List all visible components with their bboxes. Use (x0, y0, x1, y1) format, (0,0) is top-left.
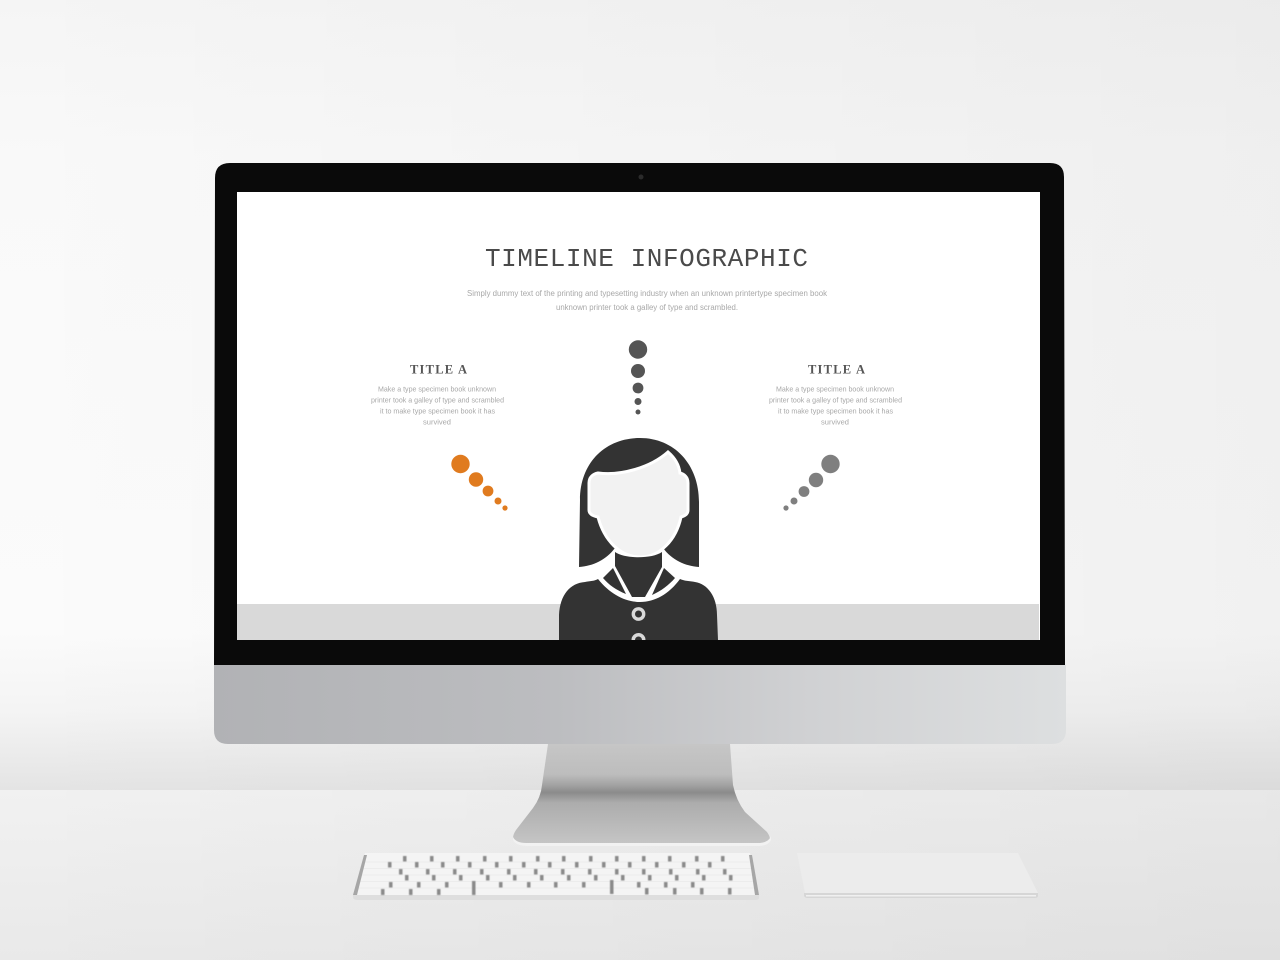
monitor bezel (214, 163, 1065, 665)
key gaps (381, 856, 732, 895)
neck (615, 552, 662, 597)
right description: Make a type specimen book unknown (776, 384, 894, 394)
subtitle: Simply dummy text of the printing and typesetting industry when an unknown printertype specimen book (467, 289, 828, 298)
desk surface (0, 790, 1280, 960)
button top (633, 609, 644, 619)
hair (579, 438, 699, 567)
subtitle (467, 289, 828, 312)
keyboard right edge (749, 855, 759, 895)
left description: Make a type specimen book unknown (378, 384, 496, 394)
right description: printer took a galley of type and scrambled (769, 396, 902, 404)
trackpad front highlight (806, 895, 1036, 896)
face (589, 452, 688, 557)
left description: survived (423, 418, 451, 426)
left text block (371, 362, 504, 426)
floor band (237, 604, 1039, 640)
monitor chin (214, 665, 1066, 744)
torso (559, 579, 718, 640)
orange dots (451, 455, 508, 511)
subtitle: unknown printer took a galley of type and scrambled. (556, 303, 738, 312)
left description: printer took a galley of type and scrambled (371, 396, 504, 404)
button bottom (632, 633, 646, 640)
title: TIMELINE INFOGRAPHIC (485, 244, 808, 274)
center dots (629, 340, 647, 414)
gray dots (783, 455, 840, 511)
keyboard left edge (353, 855, 367, 895)
right heading: TITLE A (808, 362, 865, 376)
left heading: TITLE A (410, 362, 467, 376)
right description: it to make type specimen book it has (778, 406, 893, 416)
trackpad (797, 853, 1038, 898)
right text block (769, 362, 902, 426)
webcam (638, 174, 644, 180)
right description (769, 384, 902, 426)
keyboard (353, 853, 759, 900)
screen slide (237, 192, 1040, 640)
monitor stand (513, 744, 771, 846)
collar right (652, 568, 675, 595)
keyboard top face (354, 853, 759, 895)
trackpad front edge (804, 893, 1038, 898)
keyboard front edge (353, 895, 759, 900)
left description (371, 384, 504, 426)
left description: it to make type specimen book it has (380, 406, 495, 416)
keyboard row lines (357, 862, 757, 888)
icon: woman (559, 438, 718, 640)
trackpad surface (797, 853, 1038, 893)
right description: survived (821, 418, 849, 426)
collar left (603, 568, 626, 594)
